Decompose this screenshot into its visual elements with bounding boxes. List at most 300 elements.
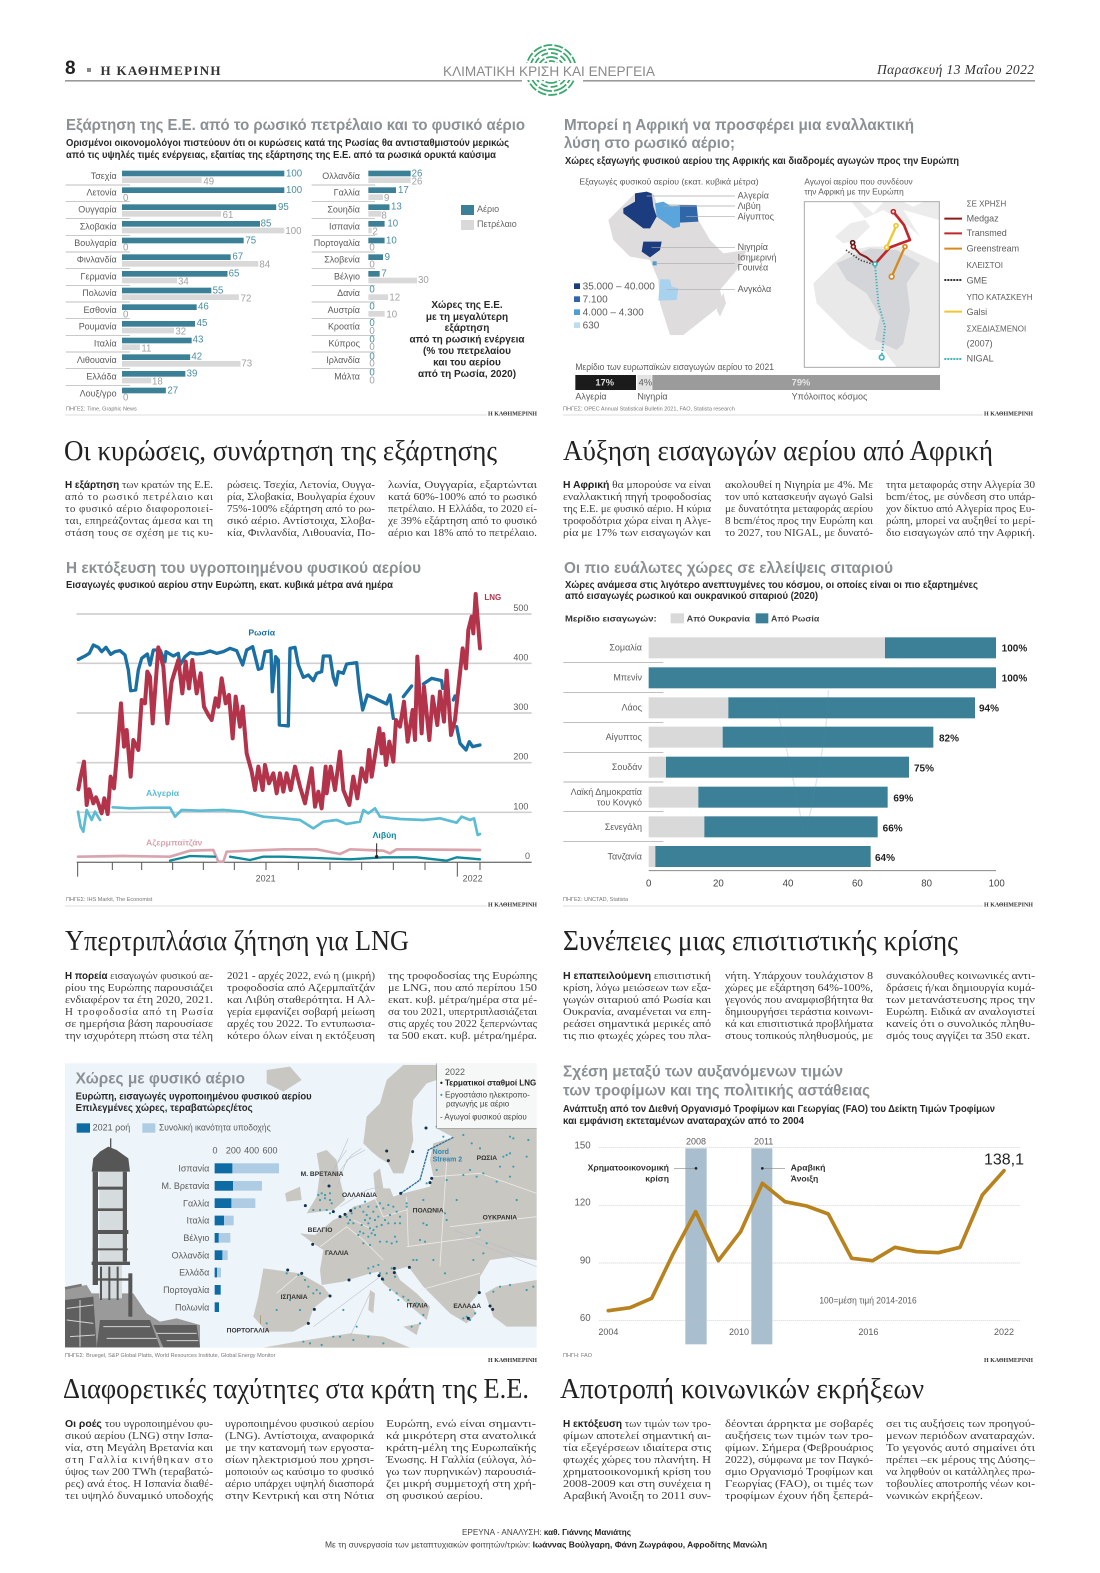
panel: food prices and unrest line chart bbox=[563, 1064, 1033, 1364]
chart title: Εξάρτηση της Ε.Ε. από το ρωσικό πετρέλαιο και το φυσικό αέριο bbox=[66, 117, 525, 134]
map: pipelines: ΣΕ ΧΡΗΣΗ bbox=[967, 200, 1006, 209]
text block: African gas imports: τον υπό κατασκευήν αγωγό Galsi bbox=[725, 491, 873, 503]
legend and bars: 40 bbox=[783, 879, 793, 890]
map: pipelines: GME bbox=[967, 275, 987, 285]
map: African exporters: Γουινέα bbox=[738, 263, 768, 273]
bars: right column countries: 26 bbox=[412, 177, 422, 188]
bars: left column countries bbox=[66, 168, 302, 404]
chart title bbox=[563, 1064, 870, 1100]
bars: left column countries: 73 bbox=[241, 358, 252, 369]
annotation: με τη μεγαλύτερη bbox=[426, 312, 508, 323]
source: ΠΗΓΗ: FAO bbox=[563, 1353, 593, 1359]
text block: LNG demand: σε ημερήσια βάση παρουσίασε bbox=[65, 1018, 213, 1030]
legend and bars: Τανζανία bbox=[608, 851, 642, 861]
legend and bars: 100 bbox=[989, 879, 1005, 890]
text block: speeds across EU: Οι ροές του υγροποιημένου φυ- bbox=[65, 1418, 213, 1430]
map: African exporters: Ανγκόλα bbox=[738, 284, 771, 294]
text block: averting social explosions: φίμων. Σήμερα (Φεβρουάριος bbox=[725, 1442, 874, 1454]
chart title: Οι πιο ευάλωτες χώρες σε ελλείψεις σιταριού bbox=[564, 560, 893, 577]
legend and bars: 100% bbox=[1002, 644, 1027, 655]
line chart: 2016 bbox=[858, 1327, 878, 1337]
text block: speeds across EU: ύψος των 200 TWh (τεραβατώ- bbox=[65, 1466, 213, 1478]
line: Azerbaijan bbox=[78, 849, 480, 862]
text block: sanctions: πετρέλαιο. Η Ελλάδα, το 2020 εί- bbox=[388, 503, 537, 515]
map: African exporters: 35.000 – 40.000 bbox=[583, 281, 655, 292]
legend and bars: 60 bbox=[852, 879, 863, 890]
text block: sanctions: κία, Φινλανδία, Λιθουανία, Πο- bbox=[227, 527, 375, 539]
credits: ΕΡΕΥΝΑ - ΑΝΑΛΥΣΗ: καθ. Γιάννης Μανιάτης bbox=[462, 1527, 632, 1537]
text block: African gas imports: 8 bcm/έτος προς την Ευρώπη και bbox=[725, 515, 873, 527]
text block: food crisis: Η επαπειλούμενη επισιτιστική bbox=[563, 970, 711, 982]
text block: African gas imports: διο εισαγωγών από την Αφρική. bbox=[886, 527, 1035, 539]
map labels: ΕΛΛΑΔΑ bbox=[453, 1303, 481, 1310]
map: pipelines: ΥΠΟ ΚΑΤΑΣΚΕΥΗ bbox=[967, 293, 1033, 302]
text block: speeds across EU: Ευρώπη, ενώ είναι σημαντι- bbox=[386, 1418, 536, 1430]
line chart: 2022 bbox=[463, 874, 483, 884]
line chart: 2008 bbox=[686, 1136, 706, 1146]
text block: LNG demand: ρίου της Ευρώπης παρουσιάζει bbox=[65, 982, 213, 994]
bars: right column countries: Αυστρία bbox=[328, 305, 360, 315]
callout: financial crisis: Άνοιξη bbox=[791, 1173, 818, 1183]
text block: sanctions: από το ρωσικό πετρέλαιο και bbox=[65, 491, 213, 503]
text block: speeds across EU: αέριο υπάρχει υψηλή διασπορά bbox=[225, 1478, 374, 1490]
heading: speeds across EU: Διαφορετικές ταχύτητες στα κράτη της Ε.Ε. bbox=[63, 1374, 529, 1405]
map subtitle: Επιλεγμένες χώρες, τεραβατώρες/έτος bbox=[76, 1103, 253, 1114]
bars: left column countries: 100 bbox=[286, 185, 302, 196]
legend and bars: 0 bbox=[646, 879, 651, 890]
text block: speeds across EU: κράτη-μέλη της Ευρωπαϊκής bbox=[386, 1442, 537, 1454]
map: African exporters: Αλγερία bbox=[738, 190, 769, 200]
map: African exporters: 7.100 bbox=[583, 294, 608, 305]
chart subtitle: από τις υψηλές τιμές ενέργειας, εξαιτίας της εξάρτησης της Ε.Ε. από τα ρωσικά ορυκτά καύσιμα bbox=[66, 150, 497, 161]
legend and bars: Μπενίν bbox=[613, 673, 643, 683]
panel: countries with natural gas map bbox=[65, 1063, 537, 1364]
bar chart: LNG capacity: Ιταλία bbox=[187, 1216, 209, 1226]
annotation: Χώρες της Ε.Ε. bbox=[431, 300, 503, 311]
map: African exporters: 4.000 – 4.300 bbox=[583, 307, 644, 318]
text block: food crisis: συνακόλουθες κοινωνικές αντι- bbox=[886, 970, 1035, 982]
bars: left column countries: Λετονία bbox=[87, 188, 117, 198]
text block: food crisis bbox=[562, 970, 1035, 1042]
text block: speeds across EU: υγροποιημένου φυσικού αερίου bbox=[225, 1418, 375, 1430]
source: ΠΗΓΕΣ: IHS Markit, The Economist bbox=[66, 897, 153, 903]
bars: right column countries: 0 bbox=[369, 359, 375, 370]
text block: LNG demand: την ισχυρότερη πτώση στα τέλη bbox=[65, 1030, 213, 1042]
text block: averting social explosions: φίμων αποτελεί σημαντική αι- bbox=[563, 1430, 711, 1442]
bars: right column countries: Σλοβενία bbox=[324, 255, 360, 265]
text block: speeds across EU: μοποιούν ως καύσιμο το φυσικό bbox=[225, 1466, 375, 1478]
text block: African gas imports: Η Αφρική θα μπορούσε να είναι bbox=[563, 479, 711, 491]
line chart: Ρωσία bbox=[248, 627, 276, 637]
bars: right column countries: Γαλλία bbox=[334, 188, 360, 198]
bars: right column countries: 0 bbox=[369, 243, 375, 254]
text block: averting social explosions: τία εξεγέρσεων ιδιαίτερα στις bbox=[563, 1442, 712, 1454]
text block: African gas imports: εναλλακτική πηγή τροφοδοσίας bbox=[563, 491, 712, 503]
line chart: 60 bbox=[580, 1313, 591, 1324]
annotation bbox=[410, 300, 525, 380]
line chart: 100 bbox=[513, 801, 528, 811]
bars: right column countries: Βέλγιο bbox=[334, 271, 360, 281]
stacked share bar: Νιγηρία bbox=[637, 391, 668, 401]
map: pipelines: ΣΧΕΔΙΑΣΜΕΝΟΙ bbox=[967, 325, 1026, 334]
line chart: Λιβύη bbox=[373, 830, 396, 840]
bar chart: LNG capacity: Πορτογαλία bbox=[163, 1285, 209, 1295]
text block: sanctions: ρία, Σλοβακία, Βουλγαρία έχουν bbox=[227, 491, 375, 503]
text block: African gas imports: τητα μεταφοράς στην Αλγερία 30 bbox=[886, 479, 1036, 491]
text block: sanctions: σικό αέριο. Αντίστοιχα, Σλοβα- bbox=[227, 515, 375, 527]
map subtitle bbox=[76, 1091, 312, 1114]
map: African exporters: Εξαγωγές φυσικού αερίου (εκατ. κυβικά μέτρα) bbox=[579, 176, 759, 186]
bars: left column countries: Ουγγαρία bbox=[78, 205, 117, 215]
legend and bars: 69% bbox=[893, 794, 913, 805]
legend and bars: Σενεγάλη bbox=[605, 822, 642, 832]
text block: African gas imports: ρία με 17% των εισαγωγών και bbox=[563, 527, 711, 539]
text block: African gas imports: ρώπη, μπορεί να αυξηθεί το μερί- bbox=[886, 515, 1035, 527]
line chart: 200 bbox=[513, 751, 528, 761]
text block: speeds across EU: κά μικρότερη στα ανατολικά bbox=[386, 1430, 536, 1442]
text block: averting social explosions: σει τις αυξήσεις των προηγού- bbox=[886, 1418, 1035, 1430]
bars: left column countries: 61 bbox=[223, 210, 233, 221]
bar chart: LNG capacity bbox=[161, 1145, 279, 1313]
text block: speeds across EU: ρες) ανά έτος. Η Ισπανία διαθέ- bbox=[65, 1478, 213, 1490]
credits: Με τη συνεργασία των μεταπτυχιακών φοιτητών/τριών: Ιωάννας Βούλγαρη, Φάνη Ζωγράφου, Αφροδίτης Μανώλη bbox=[325, 1540, 767, 1550]
dots: gas power plants bbox=[267, 1127, 533, 1345]
map labels bbox=[227, 1149, 517, 1334]
line chart: Αζερμπαϊτζάν bbox=[146, 837, 203, 847]
panel: wheat shortage stacked bars: Η ΚΑΘΗΜΕΡΙΝΗ bbox=[984, 902, 1033, 908]
line chart: Αλγερία bbox=[146, 788, 180, 798]
text block: food crisis: κανείς ότι ο συνολικός πληθυ- bbox=[886, 1018, 1035, 1030]
text block: sanctions: ρώσεις. Τσεχία, Λετονία, Ουγγα- bbox=[227, 479, 375, 491]
text block: averting social explosions: μενων περιόδων αναταραχών. bbox=[886, 1430, 1035, 1442]
line chart: 400 bbox=[513, 652, 528, 662]
chart title: λύση στο ρωσικό αέριο; bbox=[564, 135, 735, 152]
map: African exporters bbox=[574, 176, 776, 335]
text block: speeds across EU: σίων ηλεκτρισμού που χρησι- bbox=[225, 1454, 374, 1466]
text block: LNG demand: τροφοδοσία από Αζερμπαϊτζάν bbox=[227, 982, 375, 994]
map: pipelines: Galsi bbox=[967, 307, 987, 317]
line: Libya bbox=[170, 856, 480, 861]
bars: left column countries: 100 bbox=[286, 168, 302, 179]
bars: left column countries: Τσεχία bbox=[91, 171, 117, 181]
stacked share bar: 17% bbox=[595, 378, 615, 388]
source: ΠΗΓΕΣ: OPEC Annual Statistical Bulletin 2021, FAO, Statista research bbox=[563, 406, 735, 412]
bar chart: LNG capacity: 200 bbox=[226, 1145, 241, 1155]
text block: sanctions: στάση τους σε σχέση με τις κυ- bbox=[65, 527, 213, 539]
stacked share bar: Υπόλοιπος κόσμος bbox=[792, 391, 868, 401]
map: African exporters: 630 bbox=[583, 320, 600, 331]
text block: sanctions: το φυσικό αέριο διαφοροποιεί- bbox=[65, 503, 213, 515]
text block: food crisis: γωγών σιταριού από Ρωσία και bbox=[562, 994, 711, 1006]
line chart: 138,1 bbox=[984, 1151, 1024, 1168]
line chart: 2010 bbox=[729, 1327, 749, 1337]
panel: countries with natural gas map: Η ΚΑΘΗΜΕΡΙΝΗ bbox=[488, 1358, 537, 1364]
map labels: ΓΑΛΛΙΑ bbox=[325, 1250, 349, 1257]
map: pipelines: Transmed bbox=[967, 228, 1007, 238]
text block: averting social explosions: δέονται άρρηκτα με σοβαρές bbox=[725, 1418, 874, 1430]
text block: LNG demand: και Λιβύη σταθερότητα. Η Αλ- bbox=[227, 994, 375, 1006]
legend and bars: Μερίδιο εισαγωγών: bbox=[565, 614, 657, 624]
bars: left column countries: Λουξ/γρο bbox=[80, 389, 117, 399]
text block: African gas imports: τροφοδότρια χώρα είναι η Αλγε- bbox=[563, 515, 711, 527]
bars: right column countries: Πορτογαλία bbox=[314, 238, 360, 248]
legend and bars: Λαϊκή Δημοκρατία bbox=[571, 787, 642, 797]
bars: left column countries: 85 bbox=[261, 219, 271, 230]
map: pipelines: (2007) bbox=[967, 339, 993, 349]
map labels: Stream 2 bbox=[433, 1156, 462, 1163]
text block: food crisis: τις πιο φτωχές χώρες του πλα- bbox=[563, 1030, 711, 1042]
bars: right column countries: 0 bbox=[369, 335, 375, 346]
map subtitle: Ευρώπη, εισαγωγές υγροποιημένου φυσικού αερίου bbox=[76, 1091, 312, 1102]
bars: right column countries: 0 bbox=[369, 351, 375, 362]
panel: Africa gas alternative bbox=[563, 117, 1033, 418]
source: ΠΗΓΕΣ: Time, Graphic News bbox=[66, 406, 137, 412]
text block: food crisis: κρίση, λόγω μειώσεων των εξα- bbox=[563, 982, 711, 994]
text block: sanctions: Η εξάρτηση των κρατών της Ε.Ε. bbox=[65, 479, 213, 491]
source: ΠΗΓΕΣ: UNCTAD, Statista bbox=[563, 897, 629, 903]
map legend: 2022 bbox=[445, 1067, 465, 1077]
panel: EU dependence bar chart: Η ΚΑΘΗΜΕΡΙΝΗ bbox=[488, 412, 537, 418]
legend and bars: Σουδάν bbox=[612, 762, 643, 772]
source: ΠΗΓΕΣ: Bruegel, S&P Global Platts, World Resources Institute, Global Energy Monitor bbox=[65, 1353, 276, 1359]
bars: right column countries: Κροατία bbox=[328, 322, 360, 332]
illustration: refinery tower bbox=[65, 1138, 200, 1347]
bars: left column countries: 46 bbox=[198, 301, 209, 312]
chart title bbox=[564, 117, 914, 152]
legend and bars: Από Ουκρανία bbox=[687, 614, 751, 624]
text block: speeds across EU: στη Γαλλία κινήθηκαν στο bbox=[65, 1454, 214, 1466]
line chart: 150 bbox=[575, 1140, 591, 1151]
bars: right column countries: Ολλανδία bbox=[322, 171, 360, 181]
text block: averting social explosions: νωνικών εκρήξεων. bbox=[886, 1490, 983, 1502]
chart subtitle: Εισαγωγές φυσικού αερίου στην Ευρώπη, εκατ. κυβικά μέτρα ανά ημέρα bbox=[66, 580, 394, 591]
bars: right column countries: 7 bbox=[381, 269, 387, 280]
chart title: Η εκτόξευση του υγροποιημένου φυσικού αερίου bbox=[66, 560, 421, 577]
bars: left column countries: 0 bbox=[123, 243, 128, 254]
text block: African gas imports: ακολουθεί η Νιγηρία με 4%. Με bbox=[725, 479, 873, 491]
map legend: - Αγωγοί φυσικού αερίου bbox=[440, 1113, 527, 1122]
bars: left column countries: Ρουμανία bbox=[79, 322, 117, 332]
text block: African gas imports: της Ε.Ε. με φυσικό αέριο. Η κύρια bbox=[563, 503, 711, 515]
map labels: ΟΛΛΑΝΔΙΑ bbox=[342, 1192, 377, 1199]
text block: sanctions bbox=[65, 479, 538, 539]
page header bbox=[65, 45, 1035, 95]
legend and bars: 75% bbox=[914, 764, 934, 775]
map: pipelines: Αγωγοί αερίου που συνδέουν bbox=[804, 176, 913, 186]
chart title: Μπορεί η Αφρική να προσφέρει μια εναλλακτική bbox=[564, 117, 914, 134]
bars: left column countries: 84 bbox=[259, 259, 271, 270]
bar chart: LNG capacity: Γαλλία bbox=[183, 1198, 209, 1208]
bars: left column countries: Εσθονία bbox=[83, 305, 117, 315]
chart subtitle bbox=[565, 580, 978, 602]
text block: LNG demand: με LNG, που από περίπου 150 bbox=[388, 982, 538, 994]
legend and bars: Από Ρωσία bbox=[771, 614, 820, 624]
bars: right column countries: 0 bbox=[369, 285, 375, 296]
text block: LNG demand: της τροφοδοσίας της Ευρώπης bbox=[388, 970, 538, 982]
panel: LNG surge line chart bbox=[65, 560, 537, 908]
bar chart: LNG capacity: 600 bbox=[262, 1145, 277, 1155]
heading: LNG demand: Υπερτριπλάσια ζήτηση για LNG bbox=[65, 926, 409, 957]
text block: speeds across EU: ζει μικρή συμμετοχή στη χρή- bbox=[386, 1478, 536, 1490]
panel: LNG surge line chart: Η ΚΑΘΗΜΕΡΙΝΗ bbox=[488, 902, 537, 908]
legend and bars: Σομαλία bbox=[609, 643, 642, 653]
bars: left column countries: 95 bbox=[278, 202, 289, 213]
line chart bbox=[575, 1136, 1024, 1344]
bars: right column countries: Ισπανία bbox=[329, 221, 360, 231]
legend: Πετρέλαιο bbox=[477, 219, 517, 229]
text block: African gas imports: με δυνατότητα μεταφοράς αερίου bbox=[725, 503, 874, 515]
callout: financial crisis: Αραβική bbox=[791, 1163, 825, 1173]
icon: fingerprint logo bbox=[526, 45, 576, 95]
text block: averting social explosions: 2022), σύμφωνα με τον Παγκό- bbox=[725, 1454, 873, 1466]
text block: averting social explosions: σμιο Οργανισμό Τροφίμων και bbox=[725, 1466, 873, 1478]
bars: left column countries: 32 bbox=[175, 327, 186, 338]
text block: food crisis: κά και επισιτιστικά προβλήματα bbox=[725, 1018, 873, 1030]
annotation: από τη ρωσική ενέργεια bbox=[410, 334, 525, 346]
text block: food crisis: Ευρώπη. Ειδικά αν αναλογιστεί bbox=[886, 1006, 1035, 1018]
bars: right column countries: 0 bbox=[369, 259, 375, 270]
bars: left column countries: Φινλανδία bbox=[77, 255, 117, 265]
text block: averting social explosions: να ληφθούν οι κατάλληλες πρω- bbox=[886, 1466, 1035, 1478]
date: Παρασκευή 13 Μαΐου 2022 bbox=[876, 62, 1034, 77]
text block: food crisis: γεγονός που αναμφισβήτητα θα bbox=[724, 994, 873, 1006]
chart title: Σχέση μεταξύ των αυξανόμενων τιμών bbox=[563, 1064, 843, 1080]
text block: averting social explosions: τροφίμων έχουν ήδη ξεπερά- bbox=[725, 1490, 873, 1502]
chart subtitle bbox=[66, 138, 509, 161]
text block: LNG demand bbox=[65, 970, 538, 1042]
text block: African gas imports: bcm/έτος, με σύνδεση στο υπάρ- bbox=[886, 491, 1035, 503]
dots: LNG terminals bbox=[288, 1128, 493, 1323]
map labels: ΠΟΡΤΟΓΑΛΙΑ bbox=[227, 1327, 270, 1334]
bar chart: LNG capacity: 0 bbox=[212, 1145, 217, 1155]
line: Algeria bbox=[78, 807, 480, 835]
bars: left column countries: 18 bbox=[152, 377, 163, 388]
bars: left column countries: 34 bbox=[178, 277, 189, 288]
bars: right column countries: 10 bbox=[386, 309, 397, 320]
bars: left column countries: Πολωνία bbox=[82, 288, 117, 298]
bars: left column countries: Γερμανία bbox=[81, 271, 117, 281]
text block: speeds across EU: σικού αερίου (LNG) στην Ισπα- bbox=[65, 1430, 213, 1442]
bar chart: LNG capacity: 400 bbox=[244, 1145, 259, 1155]
text block: LNG demand: Η τροφοδοσία από τη Ρωσία bbox=[65, 1006, 213, 1018]
text block: averting social explosions: τοβουλίες αποτροπής νέων κοι- bbox=[886, 1478, 1035, 1490]
line chart: 500 bbox=[513, 603, 528, 613]
annotation: και του αερίου bbox=[433, 358, 501, 368]
text block: LNG demand: τα 500 εκατ. κυβ. μέτρα/ημέρα. bbox=[388, 1030, 537, 1042]
stacked share bar: Αλγερία bbox=[575, 391, 607, 401]
annotation: εξάρτηση bbox=[445, 323, 489, 334]
line chart bbox=[77, 593, 532, 884]
legend and bars: 94% bbox=[979, 704, 999, 715]
annotation: από τη Ρωσία, 2020) bbox=[418, 369, 516, 380]
chart subtitle bbox=[563, 1104, 995, 1127]
bars: right column countries: Μάλτα bbox=[334, 372, 360, 382]
panel: wheat shortage stacked bars bbox=[563, 560, 1033, 908]
bars: right column countries: 0 bbox=[369, 326, 375, 337]
text block: food crisis: δημιουργήσει τεράστια κοινωνι- bbox=[725, 1006, 873, 1018]
text block: food crisis: των μετανάστευσης προς την bbox=[886, 994, 1035, 1006]
newspaper name: Η ΚΑΘΗΜΕΡΙΝΗ bbox=[100, 63, 220, 78]
map: Europe bbox=[227, 1063, 537, 1348]
line chart: 2022 bbox=[994, 1327, 1014, 1337]
bars: left column countries: 27 bbox=[167, 385, 178, 396]
callout: financial crisis bbox=[588, 1163, 825, 1183]
text block: LNG demand: αρχές του 2022. Το εντυπωσια- bbox=[227, 1018, 375, 1030]
bars: left column countries: Βουλγαρία bbox=[74, 238, 117, 248]
line chart: 90 bbox=[580, 1255, 591, 1266]
legend and bars: 20 bbox=[713, 879, 724, 890]
text block: African gas imports: χον δίκτυο από Αλγερία προς Ευ- bbox=[885, 503, 1035, 515]
bars: left column countries: 0 bbox=[123, 393, 128, 404]
bars: right column countries: 0 bbox=[369, 301, 375, 312]
text block: food crisis: δράσεις ή/και δημιουργία κυμά- bbox=[886, 982, 1035, 994]
legend and bars: 66% bbox=[883, 824, 903, 835]
bars: left column countries: 39 bbox=[187, 369, 197, 380]
map: African exporters: Ισημερινή bbox=[738, 253, 776, 263]
bar chart: LNG capacity: Ισπανία bbox=[178, 1164, 209, 1174]
map labels: ΒΕΛΓΙΟ bbox=[308, 1227, 332, 1234]
text block: African gas imports bbox=[563, 479, 1036, 539]
map: pipelines: ΚΛΕΙΣΤΟΙ bbox=[967, 261, 1003, 270]
text block: averting social explosions: φτωχές χώρες του πλανήτη. Η bbox=[563, 1454, 711, 1466]
bar chart: LNG capacity: Μ. Βρετανία bbox=[161, 1181, 209, 1191]
panel: food prices and unrest line chart: Η ΚΑΘΗΜΕΡΙΝΗ bbox=[984, 1358, 1033, 1364]
bars: right column countries: 0 bbox=[369, 318, 375, 329]
chart subtitle: Χώρες ανάμεσα στις λιγότερο ανεπτυγμένες του κόσμου, οι οποίες είναι οι πιο εξαρτημένες bbox=[565, 580, 978, 591]
text block: averting social explosions: Γεωργίας (FAO), οι τιμές των bbox=[725, 1478, 873, 1490]
bars: left column countries: 45 bbox=[197, 318, 207, 329]
text block: food crisis: ρεάσει σημαντικά μερικές από bbox=[563, 1018, 712, 1030]
text block: speeds across EU: ση φυσικού αερίου. bbox=[386, 1490, 483, 1502]
map: pipelines bbox=[804, 176, 1033, 367]
stacked share bar bbox=[575, 362, 940, 401]
page number: 8 bbox=[65, 58, 76, 79]
text block: speeds across EU: (LNG). Αντίστοιχα, αναφορικά bbox=[225, 1430, 374, 1442]
bars: left column countries: 67 bbox=[232, 251, 243, 262]
text block: LNG demand: κότερο όλων είναι η εκτόξευση bbox=[227, 1030, 375, 1042]
text block: food crisis: Ουκρανία, αναμένεται να επη- bbox=[563, 1006, 711, 1018]
bars: right column countries bbox=[312, 168, 429, 386]
legend and bars bbox=[563, 613, 1027, 890]
text block: averting social explosions: Η εκτόξευση των τιμών των τρο- bbox=[563, 1418, 711, 1430]
bars: right column countries: 2 bbox=[372, 226, 378, 237]
text block: speeds across EU: γω των πυρηνικών) παρουσιά- bbox=[385, 1466, 536, 1478]
text block: LNG demand: Η πορεία εισαγωγών φυσικού αε- bbox=[65, 970, 213, 982]
text block: averting social explosions: χρηματοοικονομική κρίση του bbox=[562, 1466, 712, 1478]
map labels: ΙΤΑΛΙΑ bbox=[407, 1302, 428, 1309]
chart subtitle: Χώρες εξαγωγής φυσικού αερίου της Αφρικής και διαδρομές αγωγών προς την Ευρώπη bbox=[565, 156, 959, 167]
text block: African gas imports: το 2027, του NIGAL, με δυνατό- bbox=[725, 527, 873, 539]
legend and bars: 64% bbox=[875, 853, 895, 864]
map labels: ΠΟΛΩΝΙΑ bbox=[413, 1208, 444, 1215]
map legend: • Εργοστάσιο ηλεκτροπο- bbox=[440, 1090, 530, 1099]
bars: left column countries: 0 bbox=[123, 193, 128, 204]
bars: left column countries: 11 bbox=[141, 343, 151, 354]
bar chart: LNG capacity: Ολλανδία bbox=[172, 1250, 209, 1260]
map labels: Nord bbox=[433, 1149, 449, 1156]
text block: speeds across EU bbox=[65, 1418, 537, 1502]
heading: food crisis: Συνέπειες μιας επισιτιστικής κρίσης bbox=[563, 926, 958, 957]
bars: left column countries: 65 bbox=[229, 269, 239, 280]
text block: LNG demand: εκατ. κυβ. μέτρα/ημέρα στα μέ- bbox=[388, 994, 537, 1006]
bars: right column countries: Σουηδία bbox=[327, 205, 360, 215]
legend and bars: του Κονγκό bbox=[597, 798, 642, 808]
text block: LNG demand: σα του 2021, υπερτριπλασιάζεται bbox=[388, 1006, 537, 1018]
map labels: ΡΩΣΙΑ bbox=[477, 1155, 497, 1162]
bars: left column countries: 42 bbox=[191, 351, 202, 362]
bars: right column countries: 10 bbox=[386, 235, 397, 246]
pipeline: Nord Stream 2 bbox=[401, 1137, 453, 1193]
